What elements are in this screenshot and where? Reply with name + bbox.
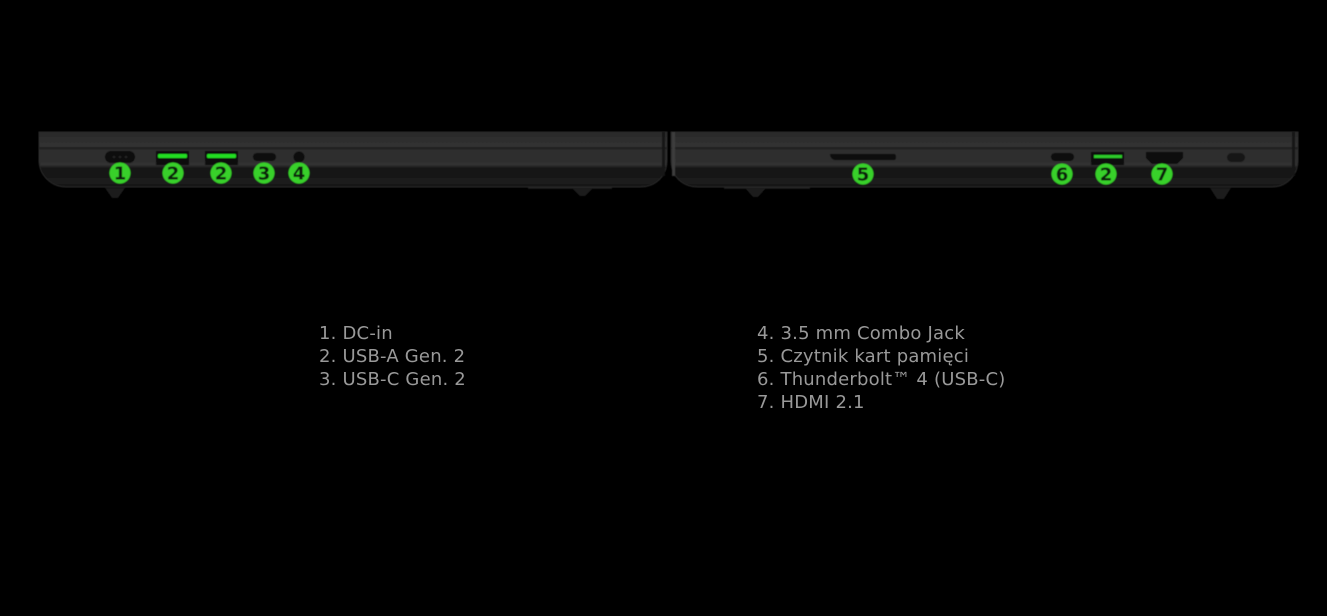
badge 1 <box>110 162 130 184</box>
right laptop body <box>671 132 1298 187</box>
badge 2 second <box>210 162 232 184</box>
badge 3: 3 <box>258 164 270 184</box>
badge 6: 6 <box>1056 164 1068 186</box>
right laptop side view <box>671 132 1298 199</box>
badge 1: 1 <box>114 164 126 184</box>
badge 5: 5 <box>857 164 869 186</box>
port: Thunderbolt <box>1051 153 1074 161</box>
left rubber foot <box>745 188 766 197</box>
badge 2: 2 <box>167 164 179 184</box>
port: USB-A <box>156 151 189 165</box>
badge 6 <box>1052 164 1072 186</box>
badge 2 <box>162 162 184 184</box>
legend list: left column: 1. DC-in <box>319 323 393 344</box>
badge 2 right: 2 <box>1100 164 1112 186</box>
legend list: left column: 3. USB-C Gen. 2 <box>319 369 466 390</box>
legend list: right column: 7. HDMI 2.1 <box>757 392 865 413</box>
badge 5 <box>852 164 874 186</box>
right rubber foot <box>1210 188 1231 199</box>
badge 2 right <box>1096 164 1116 186</box>
badge 2 second: 2 <box>215 164 227 184</box>
badge 3 <box>254 162 274 184</box>
legend list: right column: 5. Czytnik kart pamięci <box>757 346 969 367</box>
badge 4: 4 <box>293 164 305 184</box>
legend list: right column <box>757 323 1005 413</box>
left laptop side view <box>39 132 667 198</box>
port: memory card reader <box>830 154 896 160</box>
badge 7: 7 <box>1156 164 1168 186</box>
port: USB-A second <box>205 151 238 165</box>
status indicator slot <box>1227 153 1245 162</box>
port: HDMI <box>1146 152 1183 164</box>
legend list: left column <box>319 323 466 390</box>
port: audio jack <box>294 152 304 162</box>
port: USB-A <box>1091 152 1124 165</box>
right rubber foot <box>572 188 593 196</box>
legend list: right column: 6. Thunderbolt™ 4 (USB-C) <box>757 369 1005 390</box>
port: USB-C <box>253 153 276 161</box>
badge 7 <box>1152 164 1172 186</box>
legend list: left column: 2. USB-A Gen. 2 <box>319 346 465 367</box>
port: DC-in <box>105 151 135 163</box>
left rubber foot <box>105 188 125 198</box>
badge 4 <box>288 162 310 184</box>
left laptop body <box>39 132 667 187</box>
legend list: right column: 4. 3.5 mm Combo Jack <box>757 323 965 344</box>
